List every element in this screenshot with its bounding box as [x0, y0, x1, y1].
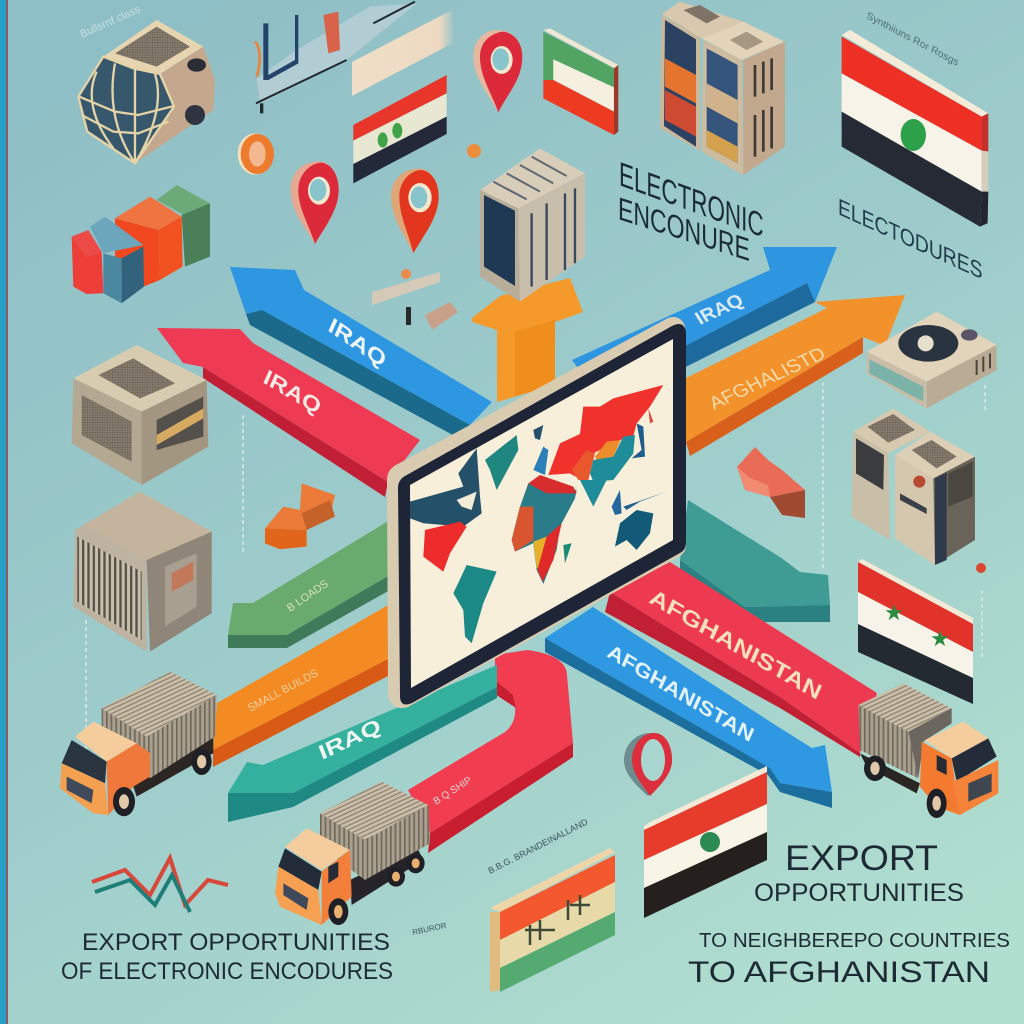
arrow: blue lower right: [545, 607, 832, 808]
arrow: green lower left: [228, 520, 390, 648]
heading: export opportunities left: [61, 929, 393, 985]
flag: top green white red: [543, 28, 618, 135]
icon: location pin top: [473, 30, 522, 112]
heading: export opportunities right: EXPORT: [785, 839, 938, 878]
icon: globe enclosure box: [78, 20, 215, 163]
heading: export opportunities left: EXPORT OPPORTUNITIES: [82, 929, 390, 956]
icon: server cabinets top: [660, 2, 785, 175]
heading: export opportunities right: [688, 839, 1010, 989]
chart: zigzag trend line: [92, 858, 228, 912]
label: green arrow: B LOADS: [285, 578, 331, 614]
heading: export opportunities right: TO AFGHANISTAN: [688, 956, 990, 989]
arrow: red lower right: [605, 562, 877, 757]
label: iraq blue: IRAQ: [325, 313, 389, 373]
arrow: orange lower left: [213, 604, 390, 767]
tablet with world map: [387, 317, 686, 708]
flag: syria right: [858, 559, 973, 704]
arrow: teal right: [680, 500, 830, 622]
icon: large vented cabinet left: [73, 492, 212, 652]
heading: electrodures: ELECTODURES: [838, 193, 983, 285]
icon: orange curved arrow right: [737, 447, 805, 518]
caption: small text above headline: RBUROR: [412, 921, 448, 937]
arrow: orange vertical: [472, 278, 583, 402]
vertical dashed guide lines: [86, 382, 985, 785]
arrow: orange right: [682, 295, 905, 456]
flag: top right large: [842, 30, 988, 227]
icon: small red dot: [976, 563, 986, 573]
icon: box with vents left: [72, 345, 208, 485]
icon: truck left: [60, 672, 217, 816]
caption: small text by truck: B.B.G. BRANDEINALLAND: [486, 816, 590, 876]
arrow: blue upper left: [230, 267, 492, 440]
icon: ring location marker: [624, 733, 672, 796]
label: red curved arrow: B Q SHIP: [432, 775, 474, 808]
arrow: blue upper right: [572, 247, 837, 410]
label: afghanistan upper: AFGHALISTD: [705, 343, 830, 414]
label: iraq red: IRAQ: [260, 365, 325, 419]
panel: beige stripe: [352, 10, 455, 96]
icon: truck right: [858, 683, 998, 818]
icon: speaker unit right: [867, 312, 997, 408]
icon: truck bottom: [275, 782, 430, 925]
heading: electronic enclosure: ELECTRONIC: [619, 155, 764, 246]
icon: desk frame sketch: [255, 2, 417, 113]
icon: colored blocks: [72, 185, 210, 303]
flag: bottom centre: [490, 848, 615, 992]
world map: [410, 385, 667, 643]
icon: orange coin: [238, 133, 274, 175]
icon: small orange dot: [467, 144, 481, 158]
icon: location pin centre: [391, 169, 439, 253]
heading: electronic enclosure: ENCONURE: [618, 191, 750, 269]
icon: scattered parts: [372, 269, 458, 330]
arrow: red left: [157, 328, 420, 497]
arrow: teal lower: [228, 665, 497, 822]
caption: faint top right text: Synthiiuns Ror Rosgs: [865, 11, 960, 69]
icon: server box centre: [480, 148, 585, 302]
caption: faint top left text: Bullsrnf class: [78, 3, 143, 41]
flag: bottom right: [644, 766, 767, 918]
icon: orange curved arrow left: [265, 483, 335, 549]
label: iraq upper right: IRAQ: [691, 290, 748, 329]
flag: syria right: ★: [930, 626, 950, 651]
heading: export opportunities right: TO NEIGHBEREPO COUNTRIES: [699, 930, 1010, 952]
label: afghanistan red: AFGHANISTAN: [646, 585, 825, 705]
icon: twin server right: [852, 408, 975, 565]
label: afghanistan blue: AFGHANISTAN: [604, 639, 757, 747]
icon: location pin left: [291, 161, 339, 244]
left edge stripe: [0, 0, 8, 1024]
arrow: red curved: [408, 650, 573, 853]
heading: export opportunities left: OF ELECTRONIC ENCODURES: [61, 958, 393, 985]
label: orange arrow: SMALL BUILDS: [246, 667, 320, 715]
heading: export opportunities right: OPPORTUNITIES: [754, 879, 964, 907]
flag: small iraq: [353, 75, 447, 183]
label: iraq teal: IRAQ: [316, 715, 384, 765]
flag: syria right: ★: [884, 600, 904, 625]
